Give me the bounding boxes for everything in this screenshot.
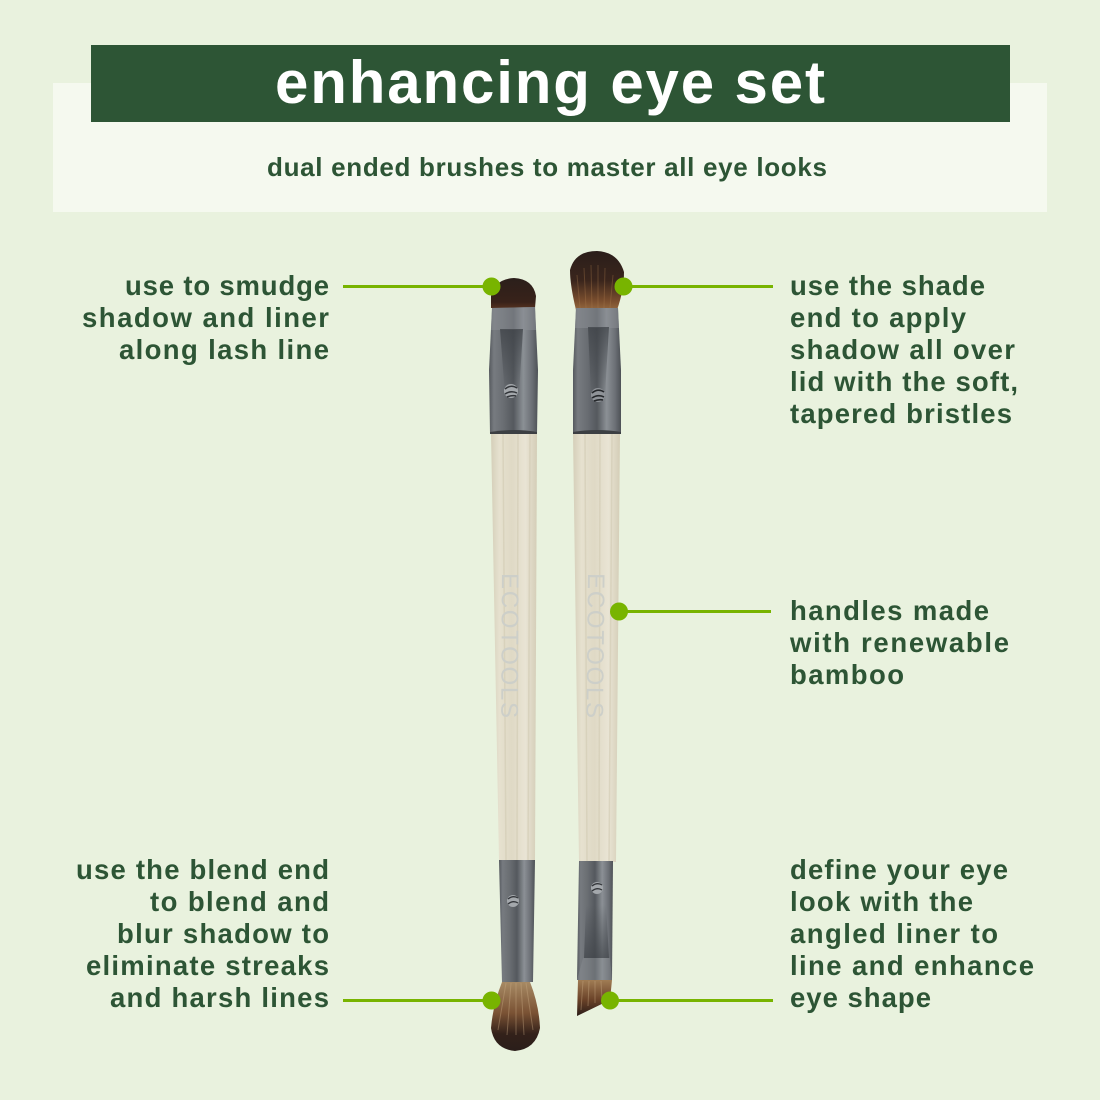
text: smudge (82, 270, 329, 365)
panel: subtitle band (53, 83, 1047, 212)
left brush logo: ECOTOOLS (495, 573, 523, 718)
callout: smudge connector (343, 278, 500, 296)
text: bamboo: handles made (790, 595, 989, 626)
text: shade: lid with the soft, (790, 366, 1018, 397)
right brush lower ferrule (577, 861, 613, 980)
left brush handle (491, 433, 537, 860)
text: bamboo: with renewable (789, 627, 1009, 658)
text: bamboo: bamboo (790, 659, 904, 690)
text: liner: angled liner to (790, 918, 998, 949)
text: shade: use the shade (790, 270, 985, 301)
callout: blend connector (343, 992, 500, 1010)
callout: shade connector (614, 278, 773, 296)
right brush logo: ECOTOOLS (580, 573, 609, 718)
subtitle: dual ended brushes to master all eye looks (267, 152, 827, 182)
text: shade (790, 270, 1018, 429)
callout: liner connector (601, 992, 773, 1010)
text: blend: use the blend end (76, 854, 329, 885)
text: shade: shadow all over (790, 334, 1015, 365)
text: blend (76, 854, 329, 1013)
right brush angled bristles (577, 980, 612, 1016)
text: liner: look with the (790, 886, 973, 917)
left brush bottom bristles (491, 982, 540, 1051)
callout: bamboo connector (610, 602, 771, 620)
text: blend: blur shadow to (117, 918, 329, 949)
right brush upper ferrule (573, 308, 621, 434)
brush: right (570, 251, 624, 1016)
right brush top bristles (570, 251, 624, 310)
text: liner (790, 854, 1034, 1013)
text: blend: to blend and (150, 886, 329, 917)
text: smudge: shadow and liner (82, 302, 329, 333)
left brush top bristles (491, 278, 536, 308)
left brush upper ferrule (489, 307, 538, 434)
left brush lower ferrule (499, 860, 535, 982)
text: liner: define your eye (790, 854, 1008, 885)
text: bamboo (789, 595, 1009, 690)
right brush handle (573, 433, 620, 862)
text: smudge: use to smudge (125, 270, 329, 301)
title banner: enhancing eye set (275, 49, 825, 116)
text: smudge: along lash line (119, 334, 329, 365)
text: blend: eliminate streaks (86, 950, 329, 981)
text: blend: and harsh lines (110, 982, 329, 1013)
brush: left (489, 278, 540, 1051)
text: shade: end to apply (790, 302, 967, 333)
title banner (91, 45, 1010, 122)
text: liner: line and enhance (790, 950, 1034, 981)
text: shade: tapered bristles (790, 398, 1012, 429)
text: liner: eye shape (790, 982, 931, 1013)
